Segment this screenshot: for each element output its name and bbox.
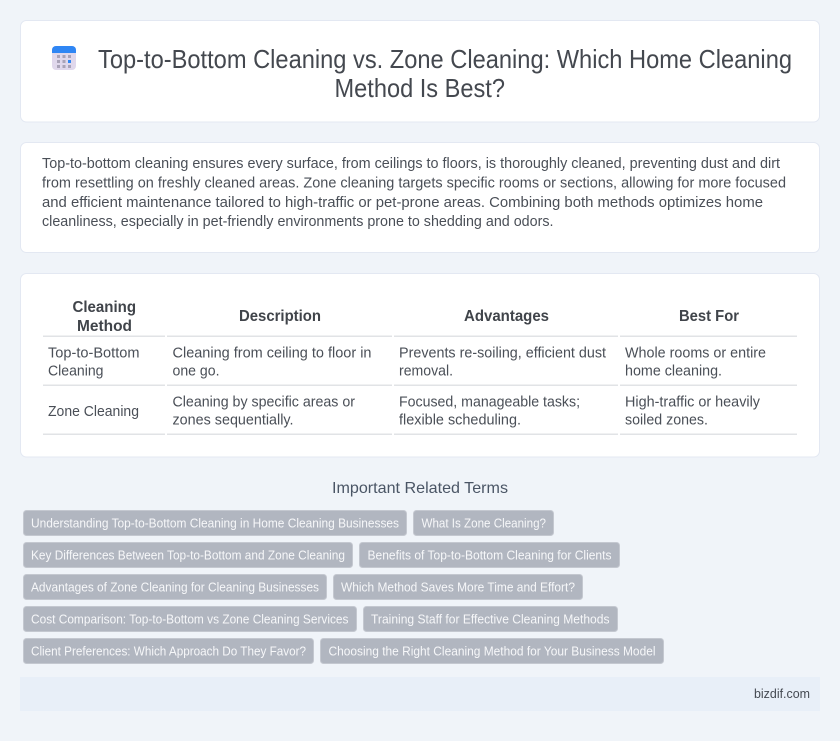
- title: Method Is Best?: [334, 73, 505, 103]
- table row: top-to-bottom cleaning: Whole rooms or entire: [625, 344, 766, 362]
- panel: summary text: [20, 142, 820, 252]
- related term tags: Advantages of Zone Cleaning for Cleaning Businesses: [31, 580, 319, 594]
- related term tags: Client Preferences: Which Approach Do They Favor?: [31, 644, 306, 658]
- related term tags: Training Staff for Effective Cleaning Methods: [371, 612, 610, 626]
- table row: zone cleaning: soiled zones.: [625, 412, 708, 428]
- table header: Advantages: [464, 308, 549, 325]
- table row: top-to-bottom cleaning: one go.: [172, 362, 220, 380]
- related term tags: Which Method Saves More Time and Effort?: [341, 580, 575, 594]
- heading: important related terms: Important Related Terms: [332, 480, 508, 497]
- table row: zone cleaning: Zone Cleaning: [48, 403, 139, 420]
- table row: top-to-bottom cleaning: Cleaning: [48, 362, 104, 380]
- text block: summary paragraph: cleanliness, especially in pet-friendly environments prone to shedding and odors.: [42, 213, 554, 230]
- footer bar: [20, 677, 820, 711]
- table row: top-to-bottom cleaning: [48, 344, 766, 380]
- text block: summary paragraph: and efficient maintenance tailored to high-traffic or pet-prone areas. Combining both methods optimizes home: [42, 194, 763, 211]
- related term tags: Key Differences Between Top-to-Bottom and Zone Cleaning: [31, 548, 345, 562]
- text block: summary paragraph: from resettling on freshly cleaned areas. Zone cleaning targets specific rooms or sections, allowing for more focused: [42, 174, 786, 192]
- table row: zone cleaning: zones sequentially.: [172, 412, 294, 428]
- table header: Cleaning: [72, 299, 136, 316]
- table row: top-to-bottom cleaning: Prevents re-soiling, efficient dust: [399, 344, 607, 362]
- panel: comparison table: [20, 274, 820, 457]
- related term tags: Cost Comparison: Top-to-Bottom vs Zone Cleaning Services: [31, 612, 349, 626]
- table row: top-to-bottom cleaning: removal.: [399, 362, 453, 380]
- table header: Description: [239, 308, 321, 325]
- table row: zone cleaning: Cleaning by specific areas or: [172, 394, 355, 410]
- footer bar: bizdif.com: [754, 686, 810, 701]
- table row: top-to-bottom cleaning: home cleaning.: [625, 362, 722, 380]
- panel: header: [20, 20, 820, 122]
- text block: summary paragraph: Top-to-bottom cleaning ensures every surface, from ceilings to floors, is thoroughly cleaned, preventing dust and dirt: [42, 155, 781, 172]
- table header: Method: [77, 318, 132, 335]
- title: Top-to-Bottom Cleaning vs. Zone Cleaning: Which Home Cleaning: [98, 44, 792, 74]
- table header: [72, 299, 739, 335]
- table header: Best For: [679, 308, 739, 325]
- related term tags: What Is Zone Cleaning?: [422, 516, 546, 530]
- related term tags: [24, 510, 664, 664]
- table row: zone cleaning: [48, 394, 760, 428]
- table row: zone cleaning: Focused, manageable tasks;: [399, 394, 580, 410]
- table row: zone cleaning: High-traffic or heavily: [625, 394, 760, 410]
- related term tags: Understanding Top-to-Bottom Cleaning in Home Cleaning Businesses: [31, 516, 399, 530]
- related term tags: Choosing the Right Cleaning Method for Your Business Model: [328, 644, 656, 658]
- icon: calendar: [52, 46, 76, 70]
- text block: summary paragraph: [42, 155, 786, 230]
- title: [98, 44, 792, 103]
- table row: top-to-bottom cleaning: Cleaning from ceiling to floor in: [172, 344, 372, 362]
- related term tags: Benefits of Top-to-Bottom Cleaning for Clients: [368, 548, 612, 562]
- table row: zone cleaning: flexible scheduling.: [399, 412, 521, 428]
- table row: top-to-bottom cleaning: Top-to-Bottom: [48, 344, 140, 362]
